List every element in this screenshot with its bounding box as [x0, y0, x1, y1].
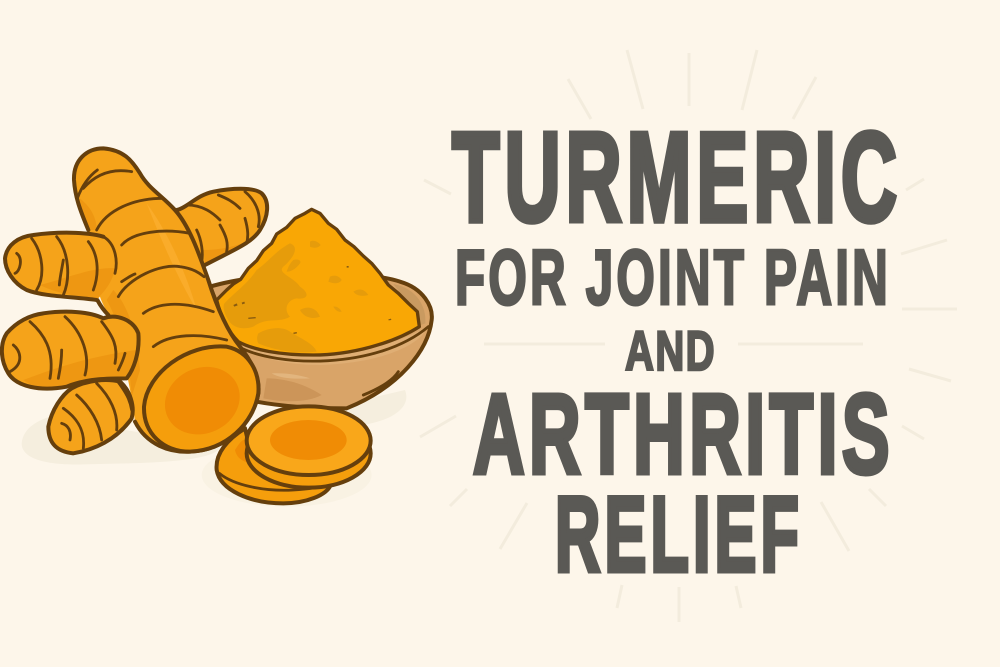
left upper root finger	[5, 233, 116, 300]
sunburst rays	[420, 50, 957, 622]
front turmeric slice	[247, 406, 371, 488]
title line: AND: AND	[625, 319, 716, 382]
main root body	[74, 148, 259, 452]
cut root face	[144, 346, 259, 452]
left middle root finger	[2, 312, 139, 389]
title	[452, 106, 902, 594]
back turmeric slice	[217, 428, 331, 503]
title line: RELIEF: RELIEF	[555, 474, 803, 594]
turmeric powder pile	[217, 209, 419, 355]
right upper root finger	[177, 189, 267, 265]
ground shadows	[22, 390, 406, 507]
left lower root finger	[48, 380, 133, 453]
turmeric illustration	[2, 148, 432, 507]
powder bowl	[210, 209, 432, 408]
